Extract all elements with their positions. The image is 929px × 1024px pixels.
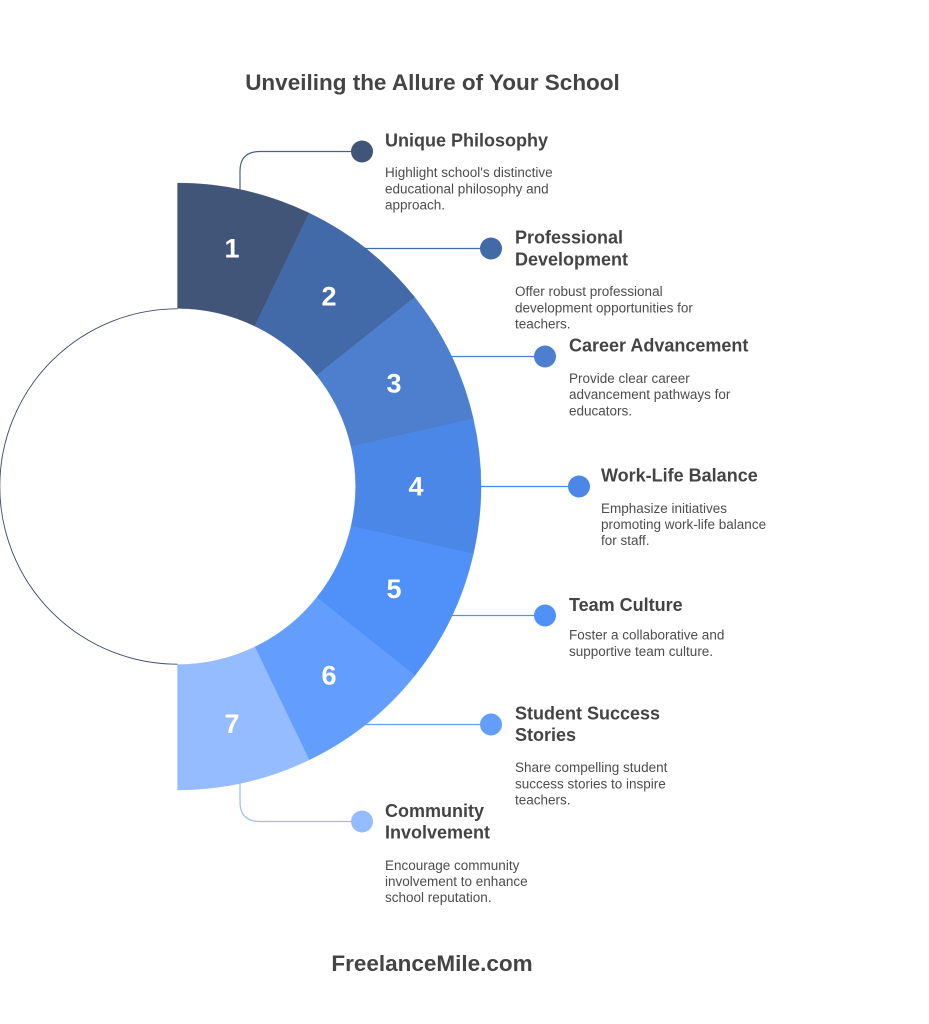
segment 3: 3 — [386, 368, 402, 398]
text block: Community Involvement: Community — [385, 801, 484, 821]
dot 7 — [351, 810, 373, 832]
segment 7: 7 — [224, 709, 240, 739]
inner circle — [0, 309, 355, 664]
text block: Community Involvement: school reputation. — [385, 890, 492, 905]
segment 3 — [317, 297, 473, 447]
text block: Career Advancement: educators. — [569, 404, 632, 418]
segment 1: 1 — [224, 234, 240, 264]
text block: Professional Development: development opportunities for — [515, 300, 693, 316]
text block: Student Success Stories: teachers. — [515, 792, 571, 808]
connector: segment 4 — [481, 486, 579, 488]
segment 5 — [317, 526, 473, 676]
segment 5: 5 — [386, 574, 402, 604]
text block: Community Involvement: Involvement — [385, 822, 490, 842]
text block: Professional Development: Professional — [515, 228, 623, 248]
dot 4 — [568, 476, 590, 498]
connector: segment 6 — [365, 724, 491, 726]
segment 6: 6 — [321, 660, 337, 690]
text block: Student Success Stories — [515, 704, 668, 808]
text block: Student Success Stories: Stories — [515, 725, 576, 745]
text block: Work-Life Balance: Emphasize initiatives — [601, 501, 727, 516]
text block: Professional Development — [515, 228, 693, 332]
title: Unveiling the Allure of Your School — [245, 70, 620, 95]
text block: Community Involvement — [385, 801, 528, 905]
dot 2 — [480, 238, 502, 260]
dot 1 — [351, 140, 373, 162]
text block: Career Advancement: Provide clear career — [569, 371, 690, 386]
text block: Career Advancement: Career Advancement — [569, 336, 748, 356]
text block: Team Culture: supportive team culture. — [569, 644, 713, 659]
connector: segment 3 — [450, 356, 545, 358]
text block: Team Culture: Team Culture — [569, 595, 683, 615]
segment 6 — [255, 597, 415, 760]
connector: segment 1 — [240, 152, 362, 190]
text block: Unique Philosophy: Highlight school's distinctive — [385, 165, 553, 180]
connector: segment 2 — [365, 248, 491, 250]
dot 6 — [480, 714, 502, 736]
segment 2: 2 — [321, 282, 337, 312]
dot 5 — [534, 604, 556, 626]
dot 3 — [534, 346, 556, 368]
text block: Team Culture: Foster a collaborative and — [569, 628, 724, 642]
text block: Career Advancement: advancement pathways for — [569, 387, 731, 402]
connector: segment 7 — [240, 783, 362, 822]
footer brand: FreelanceMile.com — [331, 951, 533, 976]
text block: Professional Development: teachers. — [515, 316, 571, 332]
connector: segment 5 — [450, 614, 545, 616]
text block: Community Involvement: involvement to enhance — [385, 874, 528, 889]
text block: Work-Life Balance: promoting work-life balance — [601, 517, 766, 532]
text block: Student Success Stories: Student Success — [515, 704, 660, 724]
text block: Unique Philosophy — [385, 130, 553, 212]
text block: Student Success Stories: success stories to inspire — [515, 776, 666, 792]
text block: Student Success Stories: Share compelling student — [515, 760, 668, 775]
segment 4: 4 — [408, 472, 424, 502]
text block: Work-Life Balance: Work-Life Balance — [601, 466, 758, 486]
text block: Work-Life Balance — [601, 466, 766, 548]
text block: Unique Philosophy: approach. — [385, 198, 445, 212]
text block: Professional Development: Offer robust professional — [515, 284, 663, 299]
segment 2 — [255, 213, 415, 376]
text block: Professional Development: Development — [515, 250, 628, 270]
text block: Unique Philosophy: educational philosophy and — [385, 182, 549, 196]
text block: Team Culture — [569, 595, 724, 659]
segment 1 — [178, 183, 309, 326]
segment 7 — [178, 647, 309, 790]
text block: Unique Philosophy: Unique Philosophy — [385, 130, 548, 150]
text block: Community Involvement: Encourage community — [385, 858, 520, 873]
text block: Work-Life Balance: for staff. — [601, 533, 650, 548]
segment 4 — [351, 419, 481, 554]
text block: Career Advancement — [569, 336, 748, 418]
